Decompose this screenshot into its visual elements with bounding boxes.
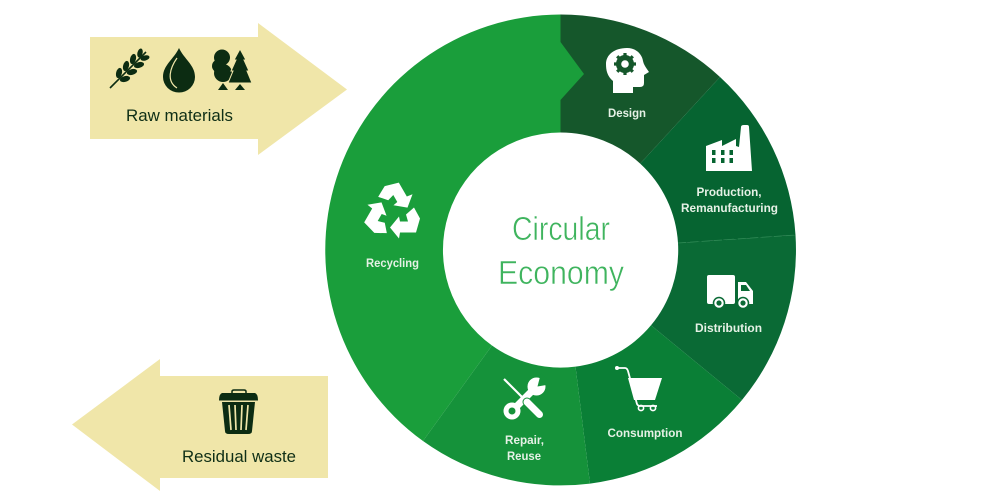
label: remanufacturing: Remanufacturing xyxy=(681,201,778,215)
segment: consumption xyxy=(576,325,742,484)
label: recycling: Recycling xyxy=(366,256,419,270)
icon: trees xyxy=(212,49,252,90)
label: production: Production, xyxy=(696,185,762,199)
label: reuse: Reuse xyxy=(507,449,541,463)
segment: recycling xyxy=(325,14,584,441)
icon: oil drop xyxy=(163,48,195,92)
icon: shopping cart xyxy=(615,366,662,411)
label: distribution: Distribution xyxy=(695,321,762,335)
icon: trash bin xyxy=(219,390,258,434)
title: circular economy: Economy xyxy=(498,254,624,291)
segment: production xyxy=(640,77,796,243)
label: repair: Repair, xyxy=(505,433,544,447)
icon: truck xyxy=(707,275,753,308)
segment: repair xyxy=(423,346,590,485)
segment: distribution xyxy=(651,235,796,400)
segment: design xyxy=(560,14,720,164)
arrow: residual waste xyxy=(72,359,328,491)
label: consumption: Consumption xyxy=(608,426,682,440)
donut chart: circular economy stages xyxy=(325,14,796,485)
label: residual waste: Residual waste xyxy=(182,447,296,466)
icon: screwdriver and wrench xyxy=(504,373,552,420)
icon: recycling arrows xyxy=(357,176,420,238)
title: circular economy xyxy=(498,210,624,291)
label: design: Design xyxy=(608,106,646,120)
label: raw materials: Raw materials xyxy=(126,106,233,125)
arrow: raw materials xyxy=(90,23,347,155)
title: circular economy: Circular xyxy=(512,210,610,247)
icon: factory xyxy=(706,125,752,171)
icon: wheat xyxy=(110,48,150,88)
icon: head with gear xyxy=(606,48,649,93)
